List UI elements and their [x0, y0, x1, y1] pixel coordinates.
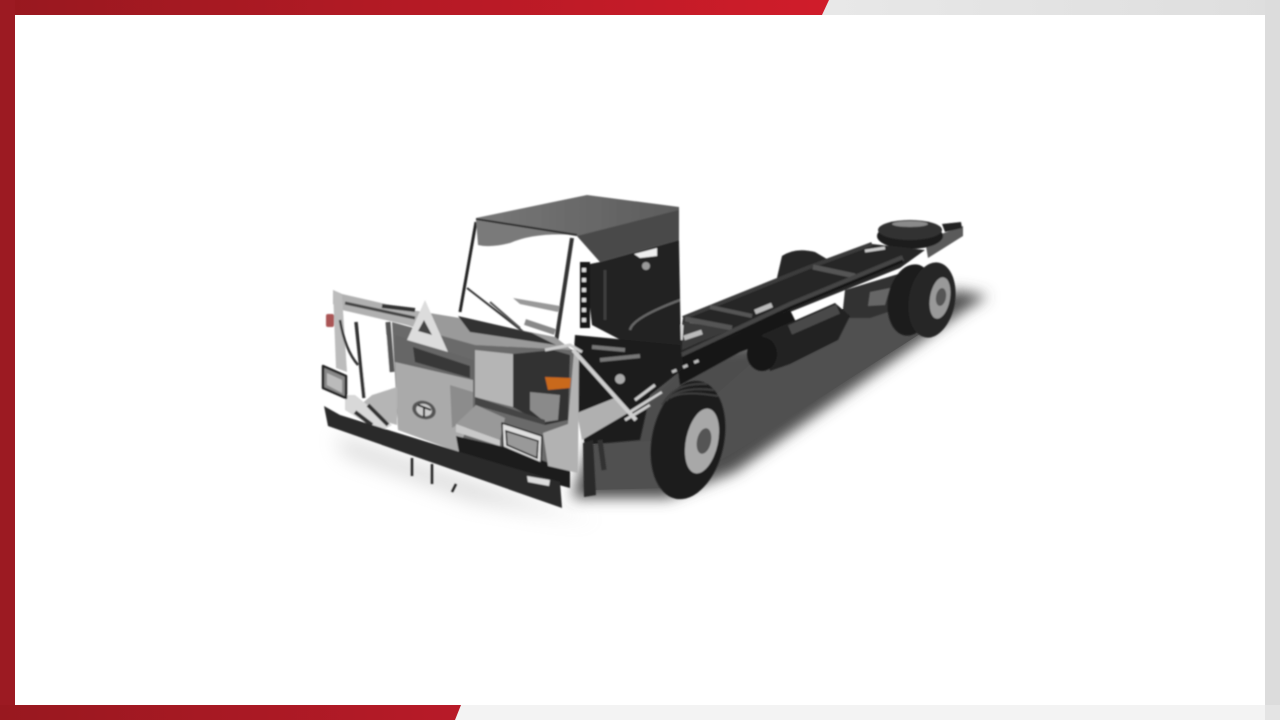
- windshield pillars and canopy roof: [460, 195, 679, 342]
- dark engine and drivetrain: [572, 335, 700, 445]
- cowl deck and upper frame: [326, 290, 572, 398]
- right corner post and side panel: [543, 345, 636, 497]
- fuel tank: [747, 303, 850, 371]
- far rear wheel and rear axle parts: [776, 250, 905, 318]
- rear dual wheel: [882, 259, 961, 341]
- left headlamp: [323, 366, 346, 398]
- ground shadow: [335, 290, 988, 522]
- TATA logo: [410, 398, 438, 422]
- steering wheel and wiper: [467, 288, 560, 337]
- chassis frame rails and cross members: [677, 244, 925, 385]
- spare wheel: [877, 220, 963, 258]
- truck chassis illustration: [323, 195, 963, 508]
- lower platform and bumper: [324, 387, 570, 508]
- cab back and seat frame: [580, 240, 681, 352]
- right headlamp: [502, 423, 542, 463]
- radiator and centre panels: [392, 322, 578, 470]
- warning triangle: [407, 300, 448, 352]
- orange indicator lamp: [545, 377, 571, 390]
- front wheel: [640, 374, 736, 506]
